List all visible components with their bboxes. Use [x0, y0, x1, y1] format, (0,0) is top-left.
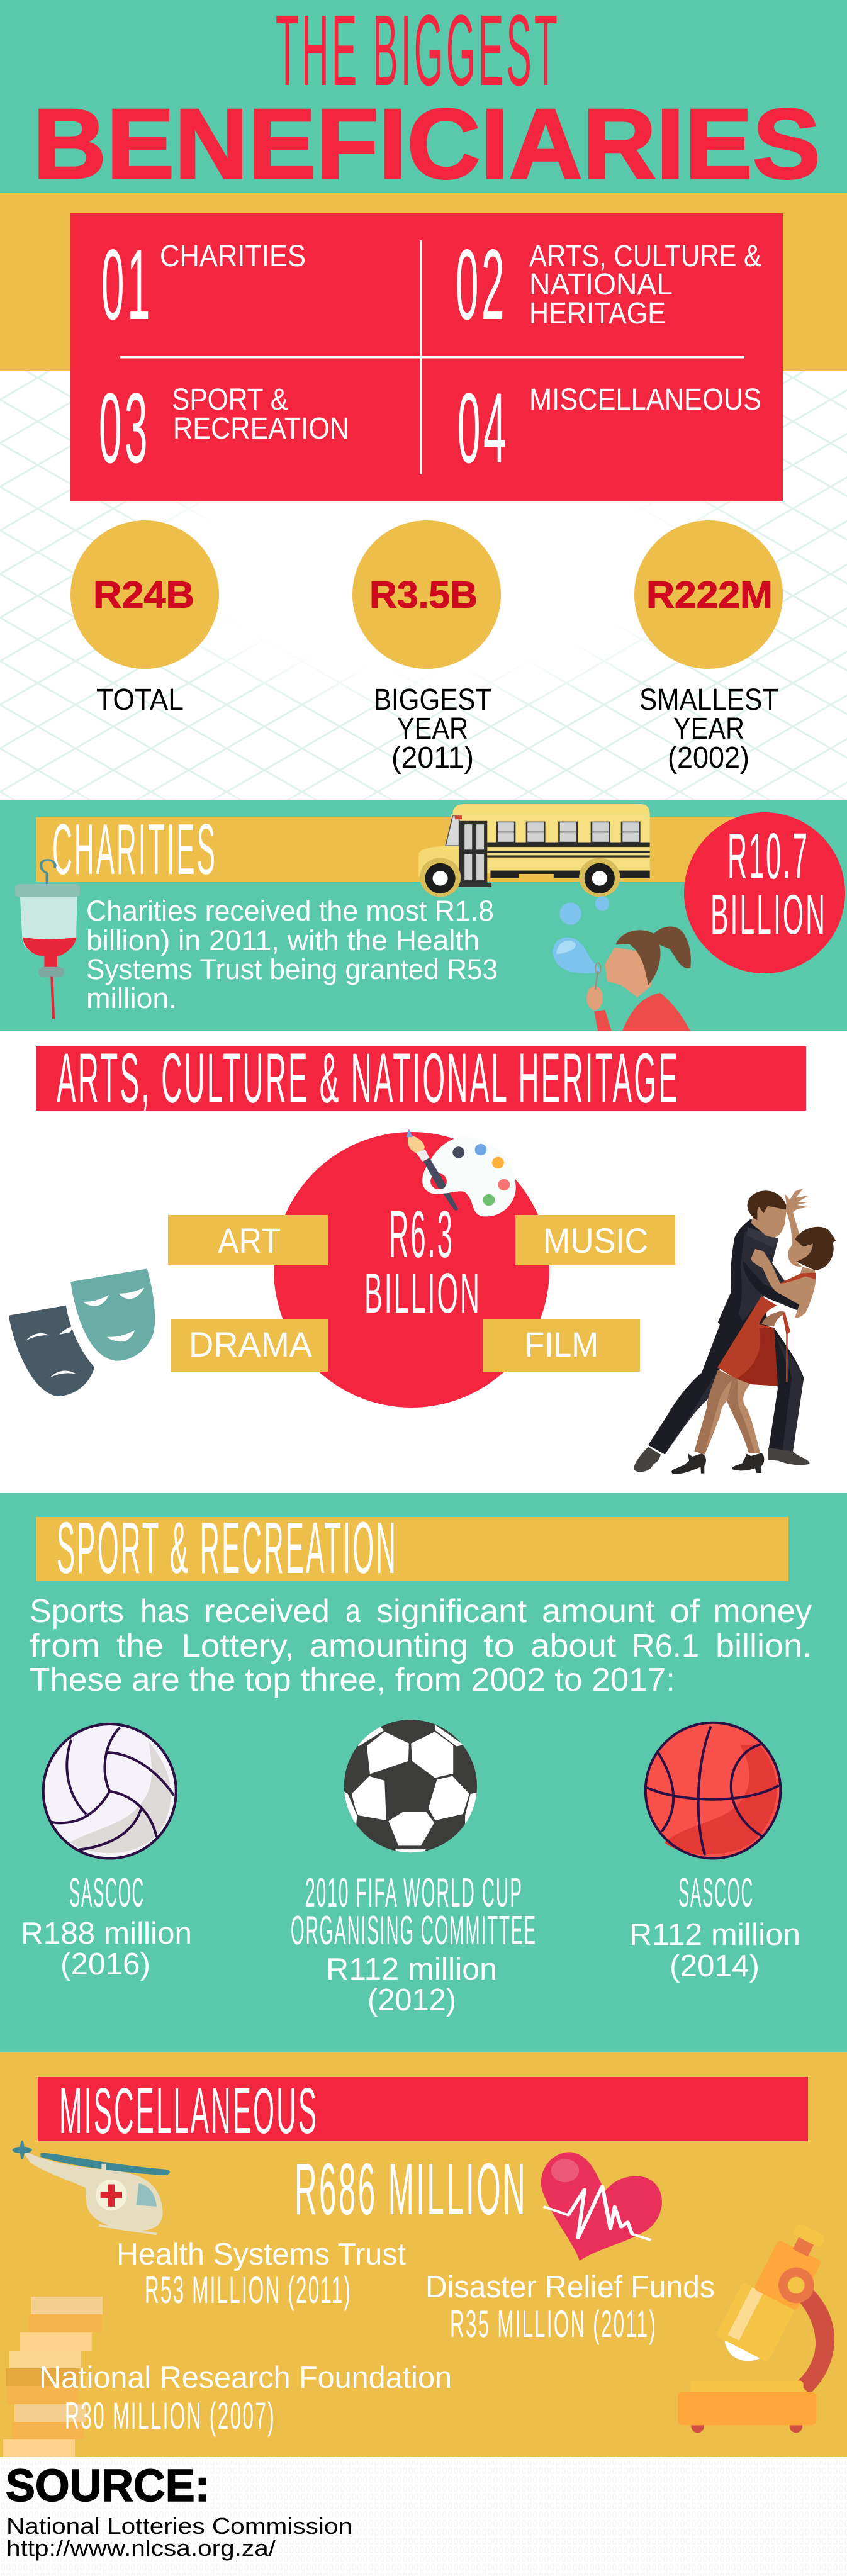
label: sascoc 2016: SASCOC	[69, 1869, 145, 1915]
label: fifa world cup 2012	[291, 1869, 537, 2017]
label: sascoc 2016: R188 million	[21, 1917, 192, 1951]
icon: volleyball	[43, 1724, 176, 1859]
text: charities description: Systems Trust being granted R53	[86, 953, 498, 985]
box: art	[168, 1215, 328, 1265]
text: sport intro	[30, 1593, 812, 1698]
text: sport intro: These are the top three, from 2002 to 2017:	[30, 1662, 675, 1698]
panel: miscellaneous	[0, 2052, 847, 2457]
text: charities description: Charities received the most R1.8	[86, 895, 494, 927]
text: sport intro: the	[116, 1628, 164, 1664]
item: national research foundation: R30 MILLION (2007)	[65, 2395, 276, 2437]
icon: helicopter	[13, 2141, 170, 2234]
icon: dancers	[634, 1188, 836, 1474]
stat: smallest year: YEAR	[673, 712, 744, 746]
label: sascoc 2014	[629, 1869, 800, 1983]
stat: biggest year: (2011)	[391, 741, 474, 775]
stat: biggest year: BIGGEST	[374, 683, 491, 717]
red circle	[274, 1132, 549, 1408]
text: sport intro: R6.1	[632, 1628, 699, 1664]
item 02 arts: 02	[456, 228, 507, 340]
badge: r10.7 billion	[684, 812, 845, 973]
panel: source	[0, 2457, 847, 2576]
label: sascoc 2014: (2014)	[670, 1949, 760, 1983]
text: sport intro: billion.	[715, 1628, 812, 1664]
item 04 miscellaneous: 04	[457, 372, 509, 484]
text: sport intro: from	[30, 1628, 100, 1664]
stat: biggest year: YEAR	[397, 712, 468, 746]
label: fifa world cup 2012: R112 million	[326, 1952, 497, 1986]
text: sport intro: about	[530, 1628, 617, 1664]
source text: National Lotteries Commission	[6, 2513, 352, 2539]
text: charities description	[86, 895, 498, 1014]
item: national research foundation	[39, 2361, 452, 2437]
icon: girl blowing bubbles	[553, 896, 691, 1031]
text: sport intro: received	[204, 1593, 330, 1630]
text: sport intro: to	[483, 1628, 515, 1664]
stat: biggest year: R3.5B	[369, 574, 478, 616]
text: sport intro: amounting	[310, 1628, 468, 1664]
box: music: MUSIC	[543, 1221, 648, 1260]
item: disaster relief funds: R35 MILLION (2011)	[450, 2303, 657, 2345]
panel: sport and recreation: 2010 FIFA WORLD CUP	[305, 1869, 523, 1915]
icon: school bus	[418, 804, 650, 897]
item: disaster relief funds	[425, 2270, 715, 2345]
source text	[6, 2513, 352, 2561]
item 01 charities: CHARITIES	[160, 240, 306, 273]
box: film	[483, 1319, 640, 1372]
item: national research foundation: National Research Foundation	[39, 2361, 452, 2395]
item: disaster relief funds: Disaster Relief Funds	[425, 2270, 715, 2304]
panel: charities	[0, 800, 847, 1031]
box: drama: DRAMA	[189, 1324, 313, 1364]
text: sport intro: of	[670, 1593, 700, 1630]
item 01 charities: 01	[101, 228, 153, 340]
icon: microscope	[678, 2212, 834, 2433]
panel: miscellaneous: R686 MILLION	[294, 2148, 527, 2230]
item 03 sport: 03	[99, 372, 150, 484]
panel: sport and recreation	[0, 1493, 847, 2052]
stat: smallest year: R222M	[646, 574, 773, 616]
text: sport intro: a	[345, 1593, 361, 1630]
label: fifa world cup 2012: (2012)	[367, 1983, 456, 2017]
panel: arts culture national heritage: BILLION	[364, 1262, 481, 1325]
panel: arts culture national heritage	[0, 1031, 847, 1493]
panel: contents	[70, 213, 783, 501]
label: sascoc 2016: (2016)	[60, 1947, 150, 1981]
text: sport intro: Sports	[30, 1593, 124, 1630]
box: art: ART	[218, 1221, 281, 1260]
item 02 arts: ARTS, CULTURE &	[529, 240, 761, 273]
yellow band	[0, 193, 847, 371]
stat: smallest year: SMALLEST	[639, 683, 778, 717]
text: charities description: billion) in 2011, with the Health	[86, 924, 480, 956]
box: film: FILM	[525, 1324, 598, 1364]
text: sport intro: significant	[376, 1593, 527, 1630]
item 04 miscellaneous	[457, 372, 761, 484]
box: drama	[171, 1319, 328, 1372]
item: health systems trust: Health Systems Trust	[116, 2237, 406, 2271]
stat: total: R24B	[93, 574, 194, 616]
stat: total: TOTAL	[96, 683, 184, 717]
source heading: SOURCE:	[6, 2461, 210, 2511]
stat: biggest year	[352, 520, 501, 775]
icon: iv bag	[15, 860, 80, 1019]
text: sport intro: money	[713, 1593, 812, 1630]
text: charities description: million.	[86, 982, 177, 1014]
icon: theatre masks	[9, 1267, 157, 1396]
icon: football	[344, 1720, 477, 1852]
icon: basketball	[646, 1723, 780, 1859]
item 03 sport: RECREATION	[173, 412, 349, 445]
item 01 charities	[101, 228, 306, 340]
stat: total	[70, 520, 219, 717]
text: r6.3 billion: R6.3	[389, 1197, 454, 1272]
source text: http://www.nlcsa.org.za/	[6, 2535, 276, 2561]
item 02 arts: HERITAGE	[529, 297, 666, 330]
item: health systems trust	[116, 2237, 406, 2311]
text: sport intro: has	[140, 1593, 189, 1630]
item 02 arts: NATIONAL	[529, 268, 673, 301]
panel: charities: CHARITIES	[52, 810, 217, 890]
header panel	[0, 0, 847, 199]
text: sport intro: Lottery,	[181, 1628, 294, 1664]
item 02 arts	[456, 228, 761, 340]
item 03 sport: SPORT &	[172, 383, 288, 417]
stat: smallest year	[634, 520, 783, 775]
box: music	[515, 1215, 675, 1265]
text: r6.3 billion	[364, 1197, 481, 1325]
item 04 miscellaneous: MISCELLANEOUS	[529, 383, 761, 417]
item: health systems trust: R53 MILLION (2011)	[145, 2269, 352, 2311]
background: lined white pattern	[0, 371, 847, 800]
icon: coin stack	[3, 2297, 103, 2457]
title: beneficiaries: BENEFICIARIES	[33, 89, 821, 199]
icon: heart with pulse	[541, 2152, 662, 2261]
text: sport intro: amount	[542, 1593, 656, 1630]
label: sascoc 2016	[21, 1869, 192, 1981]
heading: miscellaneous: MISCELLANEOUS	[59, 2075, 318, 2147]
label: sascoc 2014: R112 million	[629, 1918, 800, 1952]
stat: smallest year: (2002)	[668, 741, 749, 775]
icon: palette and brush	[407, 1129, 516, 1216]
item 03 sport	[99, 372, 349, 484]
